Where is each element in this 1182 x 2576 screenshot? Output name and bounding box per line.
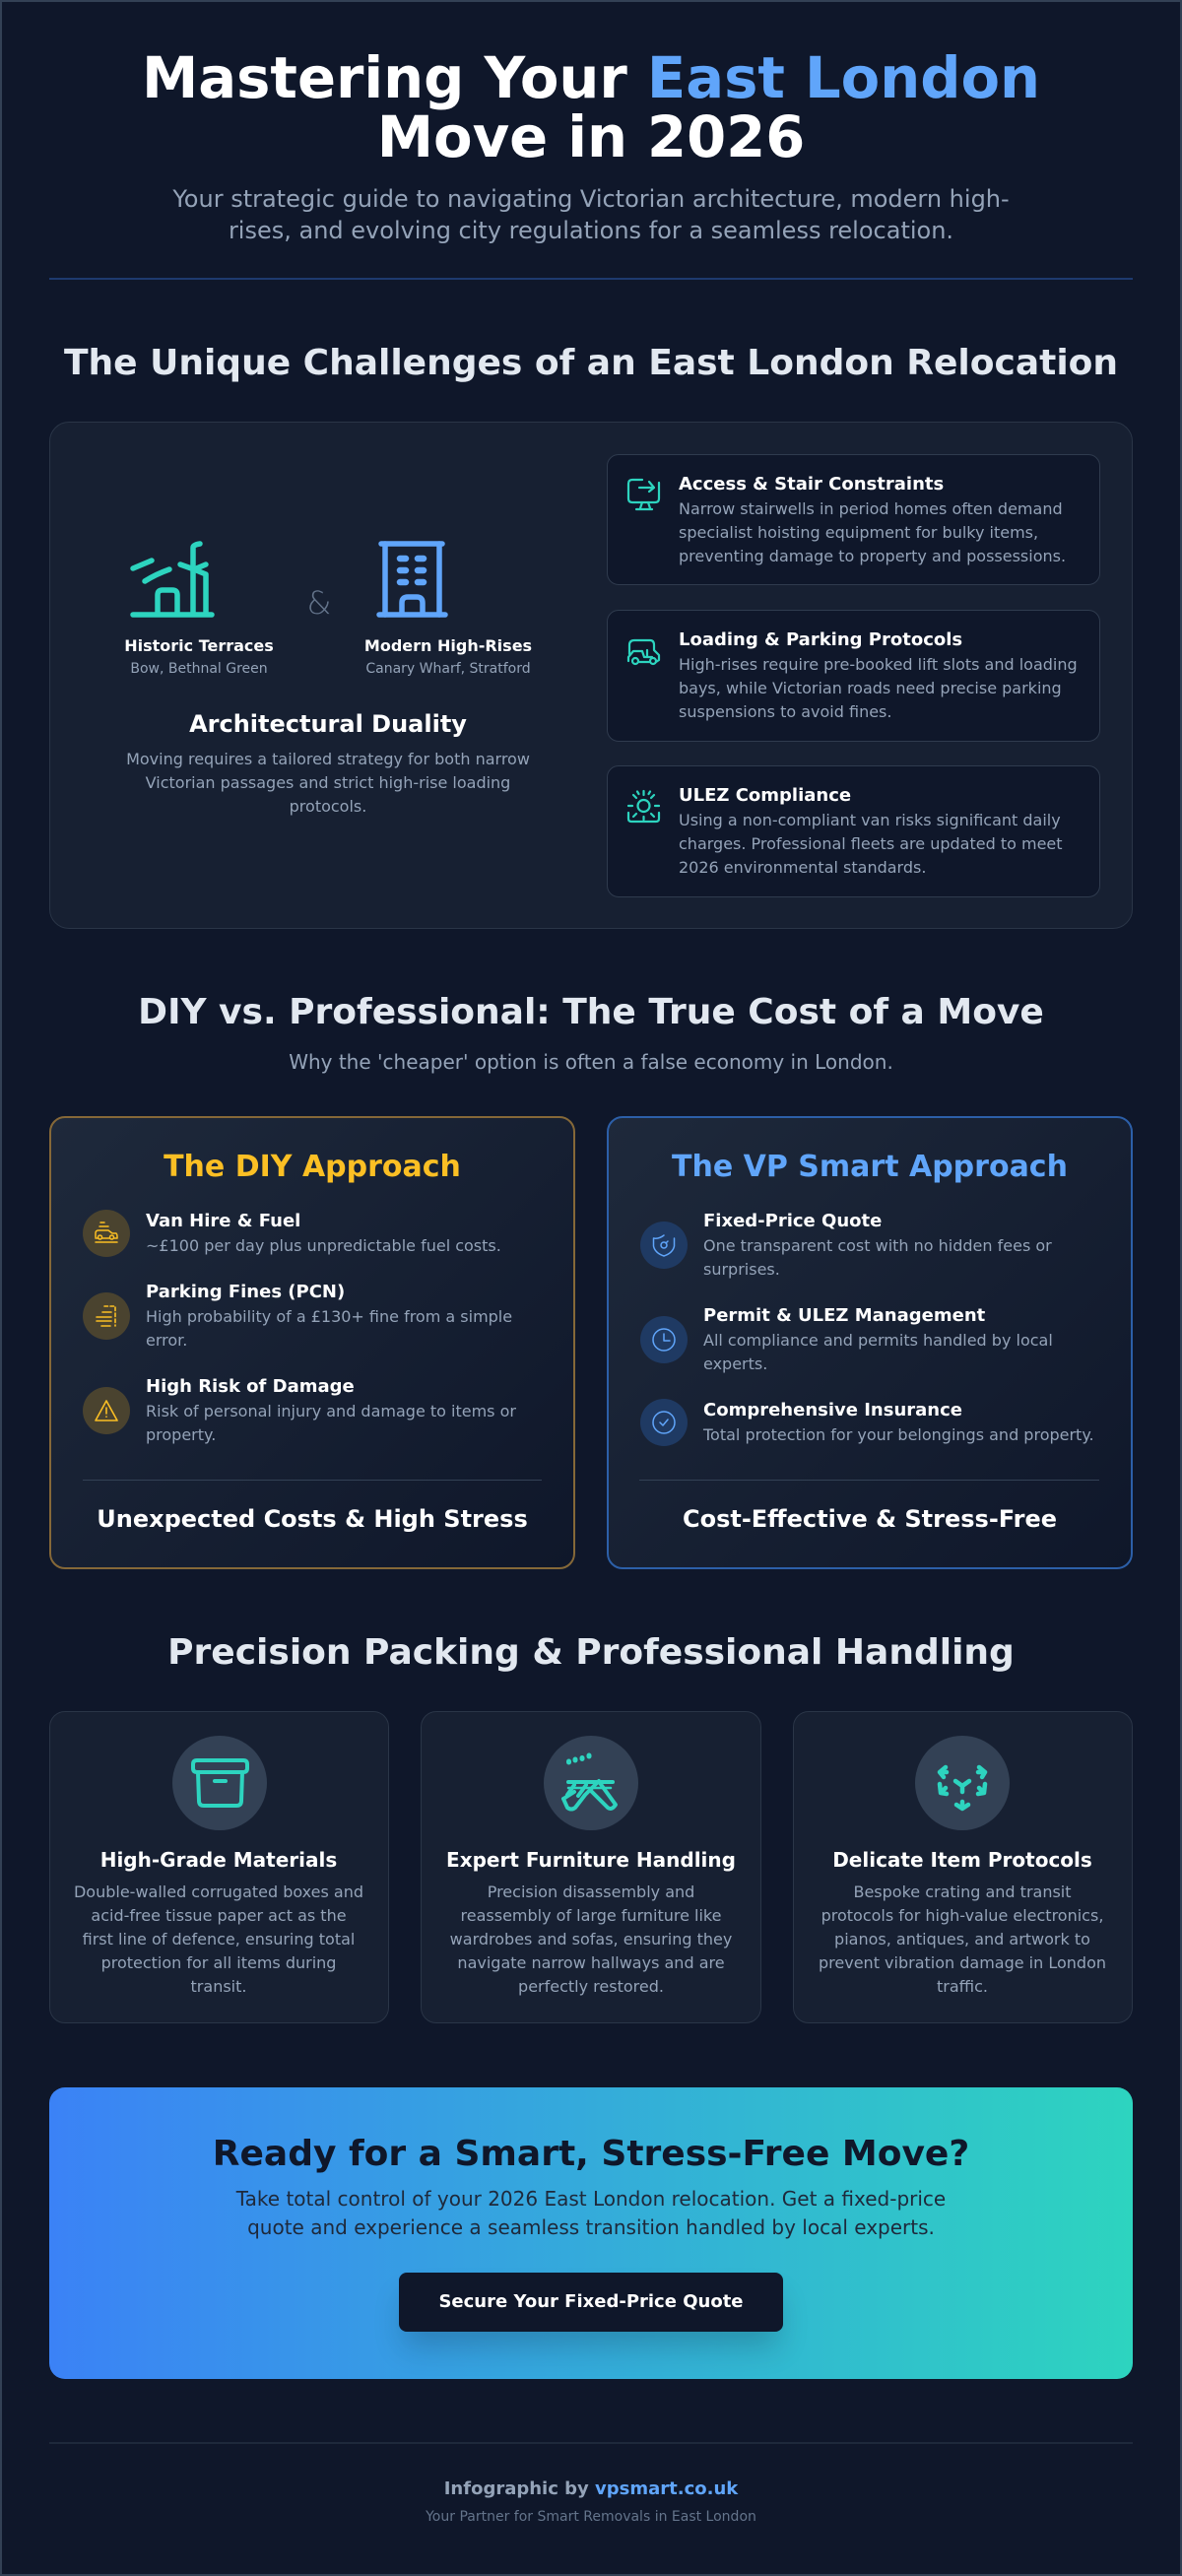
heading: furniture handling: Expert Furniture Handling [446, 1848, 736, 1872]
text: Permit & ULEZ Management [703, 1305, 985, 1326]
text: ~£100 per day plus unpredictable fuel costs. [146, 1236, 501, 1255]
text: Parking Fines (PCN) [146, 1282, 345, 1302]
text: van hire [146, 1211, 501, 1255]
section heading: packing: Precision Packing & Professional Handling [167, 1632, 1015, 1673]
icon: check circle [640, 1399, 688, 1446]
section heading: diy vs professional: DIY vs. Professional: The True Cost of a Move [138, 992, 1044, 1032]
text: Comprehensive Insurance [703, 1400, 962, 1420]
icon: diy fines [83, 1292, 130, 1340]
text: surprises. [703, 1260, 780, 1279]
text: high-grade materials: protection for all items during [101, 1953, 336, 1972]
title: Move in 2026 [377, 104, 805, 170]
text: furniture handling: perfectly restored. [518, 1977, 664, 1996]
text: architectural duality: Moving requires a tailored strategy for both narrow [126, 750, 530, 768]
label: historic terraces: Historic Terraces [124, 636, 274, 655]
text: furniture handling: Precision disassembly and [488, 1882, 694, 1901]
label: modern high-rises: Modern High-Rises [364, 636, 532, 655]
card: access and stairs [607, 454, 1100, 585]
text: architectural duality [126, 750, 530, 816]
label: bow bethnal green: Bow, Bethnal Green [130, 661, 268, 677]
icon: clock [640, 1316, 688, 1363]
text: parking fines [146, 1282, 512, 1350]
icon: diy warning [83, 1387, 130, 1434]
icon: furniture tools [544, 1736, 638, 1830]
text: ulez [679, 785, 1063, 877]
text: delicate items: pianos, antiques, and artwork to [834, 1930, 1090, 1949]
text: call to action: Take total control of your 2026 East London relocation. Get a fixed-price [236, 2187, 946, 2211]
text: high-grade materials: transit. [191, 1977, 246, 1996]
icon: modern high-rise [376, 541, 448, 618]
panel: diy approach [49, 1116, 575, 1569]
text: Risk of personal injury and damage to items or [146, 1402, 516, 1420]
text: Loading & Parking Protocols [679, 629, 962, 650]
text: architectural duality: Victorian passages and strict high-rise loading [146, 773, 510, 792]
text: call to action [236, 2187, 946, 2238]
text: loading and parking [679, 629, 1078, 721]
icon: van [626, 638, 660, 666]
text: furniture handling: navigate narrow hallways and are [457, 1953, 725, 1972]
panel: furniture handling [421, 1711, 761, 2023]
text: delicate items: protocols for high-value electronics, [821, 1906, 1103, 1925]
icon: historic terraces [130, 541, 215, 618]
text: Access & Stair Constraints [679, 474, 944, 495]
text: insurance [703, 1400, 1094, 1444]
title [142, 45, 1040, 170]
icon: sun tray [626, 790, 660, 824]
text: High Risk of Damage [146, 1376, 355, 1397]
card: ulez [607, 765, 1100, 897]
panel: call to action [49, 2087, 1133, 2379]
text: High-rises require pre-booked lift slots and loading [679, 655, 1078, 674]
text: experts. [703, 1354, 767, 1373]
text: high-grade materials: Double-walled corrugated boxes and [74, 1882, 363, 1901]
subtitle: rises, and evolving city regulations for a seamless relocation. [229, 217, 953, 244]
icon: shield [640, 1222, 688, 1269]
heading: high-grade materials: High-Grade Materials [100, 1848, 337, 1872]
text: Using a non-compliant van risks significant daily [679, 811, 1061, 829]
heading: delicate items: Delicate Item Protocols [832, 1848, 1092, 1872]
text: delicate items: Bespoke crating and transit [853, 1882, 1072, 1901]
text: architectural duality: protocols. [290, 797, 366, 816]
text: delicate items: traffic. [937, 1977, 988, 1996]
text: error. [146, 1331, 187, 1350]
text: 2026 environmental standards. [679, 858, 926, 877]
panel: vp smart approach [607, 1116, 1133, 1569]
text: preventing damage to property and possessions. [679, 547, 1066, 565]
text: ULEZ Compliance [679, 785, 851, 806]
panel: challenges [49, 422, 1133, 929]
text: access and stairs [679, 474, 1066, 565]
text: furniture handling [450, 1882, 732, 1996]
text: high-grade materials: acid-free tissue paper act as the [91, 1906, 347, 1925]
text: delicate items [819, 1882, 1106, 1996]
card: loading and parking [607, 610, 1100, 742]
subtitle [172, 185, 1010, 244]
heading: diy: The DIY Approach [164, 1150, 461, 1184]
section subtitle: Why the 'cheaper' option is often a false economy in London. [289, 1050, 893, 1074]
text: call to action: quote and experience a seamless transition handled by local experts. [247, 2214, 935, 2238]
text: Van Hire & Fuel [146, 1211, 300, 1231]
button [399, 2273, 783, 2332]
text: Fixed-Price Quote [703, 1211, 882, 1231]
heading: call to action: Ready for a Smart, Stress-Free Move? [213, 2134, 969, 2174]
text: Narrow stairwells in period homes often demand [679, 499, 1063, 518]
summary: vp smart: Cost-Effective & Stress-Free [683, 1505, 1057, 1533]
text: specialist hoisting equipment for bulky items, [679, 523, 1038, 542]
text: bays, while Victorian roads need precise parking [679, 679, 1062, 697]
text: One transparent cost with no hidden fees or [703, 1236, 1052, 1255]
heading: vp smart: The VP Smart Approach [672, 1150, 1068, 1184]
text: delicate items: prevent vibration damage in London [819, 1953, 1106, 1972]
footer tagline: Your Partner for Smart Removals in East London [426, 2509, 756, 2525]
icon: box [172, 1736, 267, 1830]
text: furniture handling: reassembly of large furniture like [461, 1906, 721, 1925]
icon: ampersand: & [307, 584, 331, 622]
text: Total protection for your belongings and property. [703, 1425, 1094, 1444]
heading: architectural duality: Architectural Duality [189, 710, 467, 738]
text: furniture handling: wardrobes and sofas, ensuring they [450, 1930, 732, 1949]
text: High probability of a £130+ fine from a simple [146, 1307, 512, 1326]
icon: monitor arrow [626, 479, 660, 510]
section heading: challenges: The Unique Challenges of an East London Relocation [64, 343, 1118, 383]
footer credit: Infographic by vpsmart.co.uk [444, 2478, 738, 2499]
icon: protection arrows [915, 1736, 1010, 1830]
panel: delicate items [793, 1711, 1133, 2023]
text: suspensions to avoid fines. [679, 702, 891, 721]
panel: high-grade materials [49, 1711, 389, 2023]
text: charges. Professional fleets are updated to meet [679, 834, 1063, 853]
subtitle: Your strategic guide to navigating Victorian architecture, modern high- [172, 185, 1010, 213]
title: Mastering Your East London [142, 45, 1040, 111]
text: property. [146, 1425, 216, 1444]
text: permit [703, 1305, 1053, 1373]
button: Secure Your Fixed-Price Quote [438, 2291, 744, 2312]
icon: diy car [83, 1210, 130, 1257]
text: high-grade materials: first line of defence, ensuring total [83, 1930, 355, 1949]
label: canary wharf: Canary Wharf, Stratford [365, 661, 531, 677]
text: high-grade materials [74, 1882, 363, 1996]
text: fixed price [703, 1211, 1052, 1279]
summary: diy: Unexpected Costs & High Stress [97, 1505, 528, 1533]
text: risk of damage [146, 1376, 516, 1444]
text: All compliance and permits handled by local [703, 1331, 1053, 1350]
